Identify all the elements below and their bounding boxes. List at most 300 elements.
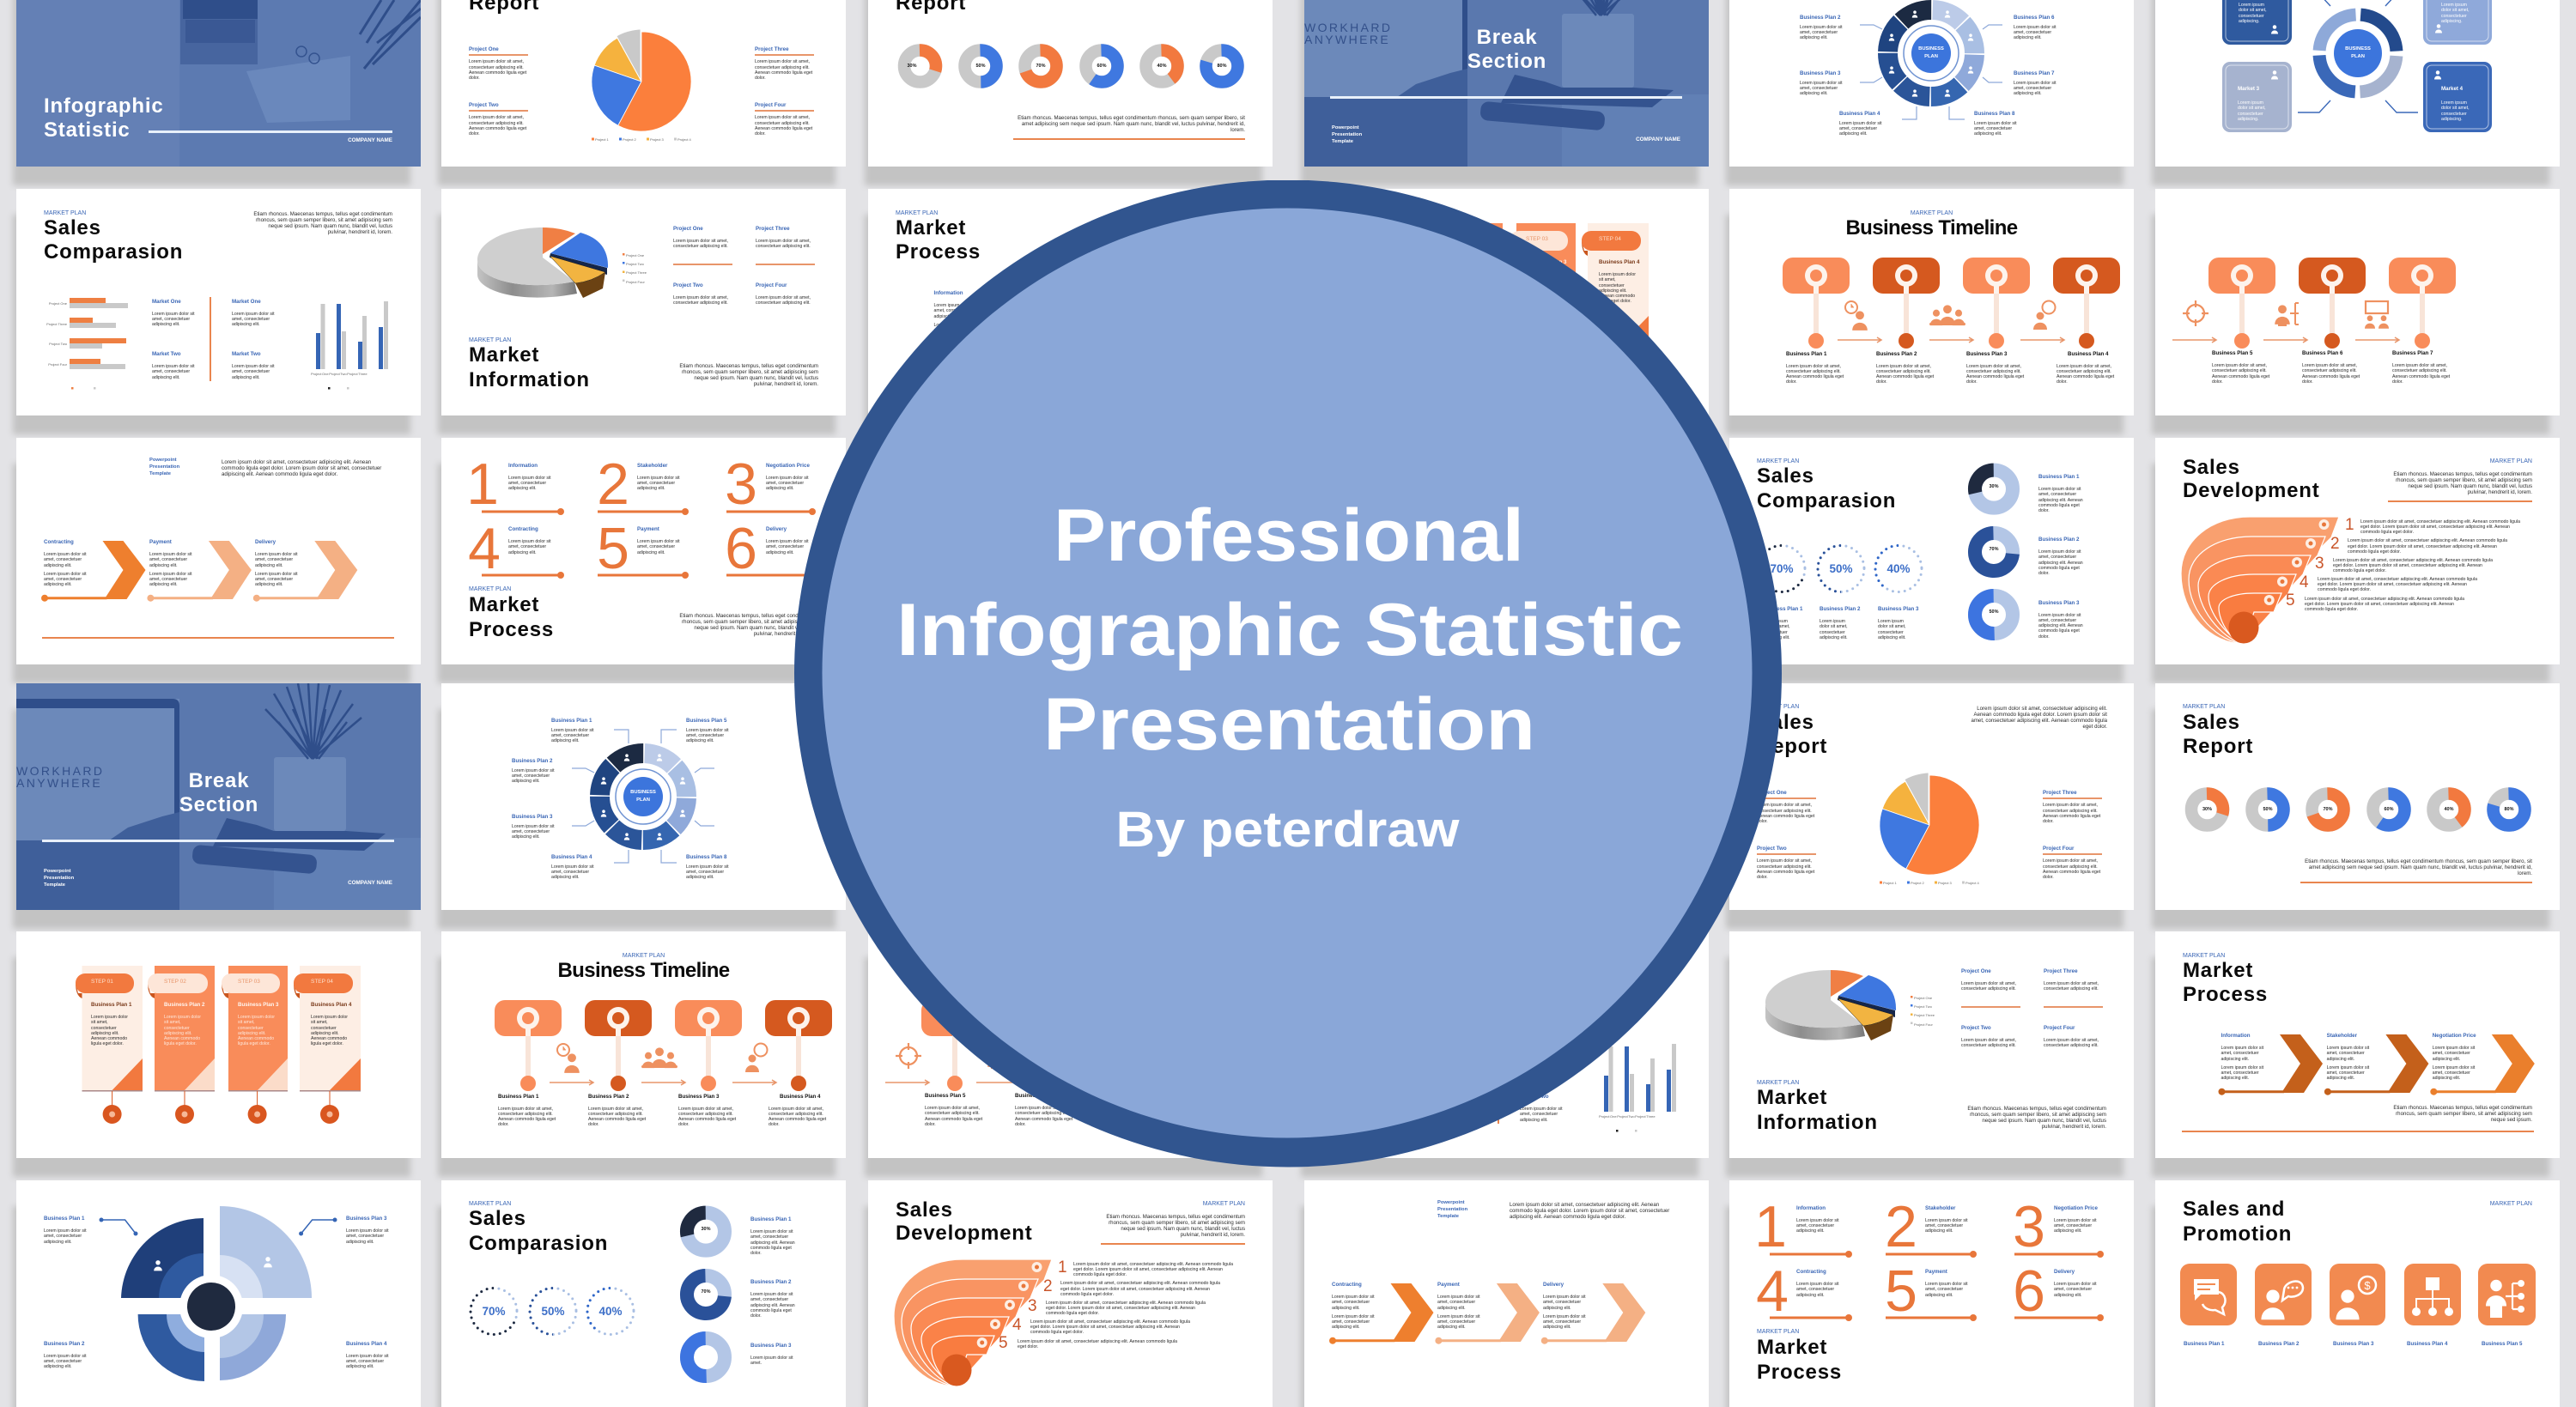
text: plan 2 <box>2038 537 2083 576</box>
percent 70: 70% <box>482 1305 506 1317</box>
title <box>1467 26 1546 73</box>
label: plan 2: Business Plan 2 <box>2258 1341 2299 1347</box>
text: market one <box>152 299 195 327</box>
panel: Sales Report pie <box>1729 683 2134 910</box>
subtitle: Powerpoint <box>1332 125 1359 130</box>
text: project four: Project Four <box>756 282 787 288</box>
donut value: 70% <box>2323 807 2332 812</box>
text: project four: Lorem ipsum dolor sit amet, consectetuer adipiscing elit. <box>2044 1038 2099 1048</box>
legend: Project 4 <box>677 137 691 141</box>
legend: Project 1 <box>595 137 609 141</box>
text: payment: Lorem ipsum dolor sit amet, consectetuer adipiscing elit. <box>637 539 680 555</box>
donut value: 50% <box>975 64 986 69</box>
text: payment <box>1925 1270 1970 1298</box>
text: market 2: Lorem ipsum dolor sit amet, consectetuer adipiscing. <box>2441 3 2470 24</box>
text: negotiation price: Negotiation Price <box>766 463 810 469</box>
text: plan 3 <box>2038 601 2083 640</box>
text: plan 3: Lorem ipsum dolor sit amet, consectetuer adipiscing elit. Aenean commodo ligula eget dolor. <box>1526 272 1563 304</box>
text: delivery: Delivery <box>1543 1282 1564 1288</box>
text: payment <box>149 540 194 587</box>
donut value: 70% <box>1989 547 1999 552</box>
title <box>469 593 554 642</box>
text: market two: Lorem ipsum dolor sit amet, consectetuer adipiscing elit. <box>232 364 275 380</box>
number 2: 2 <box>1885 1193 1917 1258</box>
text: plan 5: Business Plan 5 <box>686 718 726 724</box>
step 3 label: STEP 03 <box>238 979 260 984</box>
column chart <box>316 301 388 390</box>
text: negotiation price: Lorem ipsum dolor sit amet, consectetuer adipiscing elit. <box>766 476 809 491</box>
text: payment: Payment <box>637 526 659 532</box>
description: Etiam rhoncus. Maecenas tempus, tellus eget condimentum rhoncus, sem quam semper libero, sit amet adipiscing sem neque sed ipsum. Nam quam nunc, blandit vel, luctus pulvinar, hendrerit id, lorem. <box>679 363 818 387</box>
text: project one: Lorem ipsum dolor sit amet, consectetuer adipiscing elit. <box>673 239 728 249</box>
text: project four: Lorem ipsum dolor sit amet, consectetuer adipiscing elit. Aenean commodo ligula eget dolor. <box>755 115 812 136</box>
percent 50: 50% <box>541 1305 565 1317</box>
text: project two <box>469 102 528 136</box>
text: stakeholder: Stakeholder <box>637 463 667 469</box>
text: plan 1 <box>1786 352 1846 385</box>
text: plan 4 <box>769 1095 829 1128</box>
text: plan 4: Business Plan 4 <box>551 854 592 860</box>
text: delivery: Lorem ipsum dolor sit amet, consectetuer adipiscing elit. <box>1543 1314 1586 1330</box>
text: market two <box>152 351 195 380</box>
text: project four: Project Four <box>2044 1025 2075 1031</box>
text: plan 1: Lorem ipsum dolor sit amet, consectetuer adipiscing elit. Aenean commodo ligula eget dolor. <box>91 1015 128 1046</box>
step 4 label: STEP 04 <box>311 979 333 984</box>
text: plan 1 <box>750 1217 795 1256</box>
subtitle: Presentation <box>1332 132 1362 137</box>
legend <box>595 137 691 142</box>
donut values: 30% <box>907 64 917 69</box>
legend: Project 2 <box>623 137 636 141</box>
title <box>469 343 590 392</box>
title: Process <box>1757 1361 1842 1384</box>
text: plan 7: Lorem ipsum dolor sit amet, consectetuer adipiscing elit. <box>2014 81 2057 96</box>
label: MARKET PLAN <box>1757 704 1799 710</box>
title: Sales and <box>2183 1198 2285 1221</box>
laptop screen words <box>16 766 104 789</box>
description: Lorem ipsum dolor sit amet, consectetuer adipiscing elit. Aenean commodo ligula eget dolor. Lorem ipsum dolor sit amet, consectetuer adipiscing elit. Aenean commodo ligula eget dolor. <box>1510 1202 1669 1220</box>
title: Sales <box>2183 456 2240 479</box>
description: Etiam rhoncus. Maecenas tempus, tellus eget condimentum rhoncus, sem quam semper libero, sit amet adipiscing sem neque sed ipsum. Nam quam nunc, blandit vel, luctus pulvinar, hendrerit id, lorem. <box>679 613 818 637</box>
text: plan 3: Lorem ipsum dolor sit amet, consectetuer adipiscing elit. Aenean commodo ligula eget dolor. <box>678 1107 736 1127</box>
text: plan 2 <box>1820 607 1854 640</box>
chevrons <box>2215 1033 2537 1096</box>
text: contracting: Lorem ipsum dolor sit amet, consectetuer adipiscing elit. <box>44 552 87 568</box>
steps graphic <box>75 964 362 1125</box>
text: plan 4: Lorem ipsum dolor sit amet, consectetuer adipiscing elit. Aenean commodo ligula eget dolor. <box>1599 272 1636 304</box>
text: plan 1: Business Plan 1 <box>1379 259 1419 265</box>
panel: light chevrons <box>16 438 421 664</box>
title: Process <box>896 240 981 264</box>
text: market one <box>232 299 275 327</box>
label: MARKET PLAN <box>1757 1329 1799 1334</box>
text: market one: Market One <box>1520 1041 1549 1047</box>
text: plan 5: Lorem ipsum dolor sit amet, consectetuer adipiscing elit. Aenean commodo ligula eget dolor. <box>2212 363 2269 385</box>
donut charts <box>1966 462 2021 642</box>
text: plan 3: Business Plan 3 <box>750 1343 791 1348</box>
text: plan 1: Business Plan 1 <box>91 1002 131 1008</box>
horizontal bar chart <box>70 298 128 390</box>
bar labels: Project Two <box>49 342 67 346</box>
text: stakeholder: Stakeholder <box>1925 1205 1955 1211</box>
text: plan 1: Lorem ipsum dolor sit amet, consectetuer adipiscing elit. <box>44 1228 87 1245</box>
label: MARKET PLAN <box>469 585 511 592</box>
donut value: 50% <box>1989 609 1999 615</box>
main title <box>896 494 1683 766</box>
text: payment: Payment <box>1925 1269 1947 1275</box>
cards and ring diagram <box>2222 0 2492 132</box>
label: MARKET PLAN <box>896 209 938 216</box>
title <box>896 1198 1033 1245</box>
number 1: 1 <box>1754 1193 1787 1258</box>
text: negotiation price: Lorem ipsum dolor sit amet, consectetuer adipiscing elit. <box>1145 303 1188 319</box>
text: plan 7 <box>2392 351 2452 385</box>
text: plan 1: Lorem ipsum dolor sit amet, consectetuer adipiscing elit. <box>1762 619 1790 640</box>
text: information: Lorem ipsum dolor sit amet, consectetuer adipiscing elit. <box>2221 1065 2263 1081</box>
text: stakeholder: Lorem ipsum dolor sit amet, consectetuer adipiscing elit. <box>637 476 680 491</box>
chevrons <box>1327 1282 1649 1345</box>
text: delivery: Lorem ipsum dolor sit amet, consectetuer adipiscing elit. <box>766 539 809 555</box>
donut value: 30% <box>701 1227 711 1232</box>
text: delivery: Lorem ipsum dolor sit amet, consectetuer adipiscing elit. <box>1543 1295 1586 1311</box>
text: project three: Project Three <box>755 46 789 52</box>
title: Break <box>1477 26 1537 49</box>
text: plan 1 <box>1762 607 1796 640</box>
subtitle <box>1332 125 1362 144</box>
panel: quarter chart <box>16 1180 421 1407</box>
subtitle: Template <box>44 882 65 888</box>
panel: Market Process numbers <box>1729 1180 2134 1407</box>
title: Sales <box>1757 711 1814 734</box>
text: delivery: Lorem ipsum dolor sit amet, consectetuer adipiscing elit. <box>2054 1282 2097 1298</box>
donut value: 30% <box>2202 807 2212 812</box>
text: stakeholder: Lorem ipsum dolor sit amet, consectetuer adipiscing elit. <box>2327 1065 2369 1081</box>
panel: Sales and Promotion <box>2155 1180 2560 1407</box>
text: project three <box>755 46 814 81</box>
description: Etiam rhoncus. Maecenas tempus, tellus eget condimentum rhoncus, sem quam semper libero, sit amet adipiscing sem neque sed ipsum. Nam quam nunc, blandit vel, luctus pulvinar, hendrerit id, lorem. <box>253 211 392 235</box>
ring center label: BUSINESS <box>2345 46 2371 52</box>
label: MARKET PLAN <box>1757 1080 1799 1085</box>
title: Information <box>1757 1111 1878 1134</box>
text: plan 2: Business Plan 2 <box>1452 259 1492 265</box>
wheel center label: BUSINESS <box>630 790 656 795</box>
text: delivery: Delivery <box>2054 1269 2075 1275</box>
text: plan 1: Lorem ipsum dolor sit amet, consectetuer adipiscing elit. Aenean commodo ligula eget dolor. <box>1379 272 1416 304</box>
steps graphic <box>1363 221 1650 382</box>
text: project three: Lorem ipsum dolor sit amet, consectetuer adipiscing elit. <box>2044 981 2099 992</box>
text: plan 3 <box>1800 70 1843 96</box>
panel: Market Information 3D pie <box>1729 931 2134 1158</box>
text: plan 5: Business Plan 5 <box>2212 350 2252 356</box>
description: Etiam rhoncus. Maecenas tempus, tellus eget condimentum rhoncus, sem quam semper libero, sit amet adipiscing sem neque sed ipsum. Nam quam nunc, blandit vel, luctus pulvinar, hendrerit id, lorem. <box>1018 115 1245 132</box>
donut value: 30% <box>1989 484 1999 489</box>
number 4: 4 <box>1012 1315 1022 1334</box>
text: plan 2: Lorem ipsum dolor sit amet, consectetuer adipiscing elit. <box>1800 25 1843 40</box>
title <box>1757 711 1827 760</box>
text: plan 4 <box>1839 111 1882 136</box>
text: plan 3: Lorem ipsum dolor sit amet, consectetuer adipiscing elit. Aenean commodo ligula eget dolor. <box>1966 364 2024 385</box>
text: project two <box>673 283 732 306</box>
step 2 label: STEP 02 <box>1452 235 1474 242</box>
text: payment: Lorem ipsum dolor sit amet, consectetuer adipiscing elit. <box>1437 1314 1480 1330</box>
text: plan 1: Lorem ipsum dolor sit amet, consectetuer adipiscing elit. Aenean commodo ligula eget dolor. <box>498 1107 556 1127</box>
text: contracting: Contracting <box>44 539 74 545</box>
title: Market <box>2183 959 2253 982</box>
label: MARKET PLAN <box>1203 1201 1245 1207</box>
text: plan 3: Business Plan 3 <box>1526 259 1566 265</box>
text: negotiation price: Negotiation Price <box>1145 290 1189 296</box>
number 6: 6 <box>725 515 757 580</box>
text: plan 3: Business Plan 3 <box>346 1216 386 1222</box>
text: market 4: Lorem ipsum dolor sit amet, consectetuer adipiscing. <box>2441 100 2470 122</box>
text: project two: Project Two <box>1757 846 1787 852</box>
text: project four <box>755 102 814 136</box>
text: plan 1 <box>2038 475 2083 513</box>
text: plan 3 <box>346 1216 391 1245</box>
text: project three: Lorem ipsum dolor sit amet, consectetuer adipiscing elit. Aenean commodo ligula eget dolor. <box>755 59 812 81</box>
pie legend <box>626 252 647 287</box>
text: stakeholder <box>2327 1034 2372 1081</box>
text: contracting: Lorem ipsum dolor sit amet, consectetuer adipiscing elit. <box>1332 1295 1375 1311</box>
text: plan 5: Lorem ipsum dolor sit amet, consectetuer adipiscing elit. Aenean commodo ligula eget dolor. <box>925 1106 982 1127</box>
number 3: 3 <box>1028 1296 1037 1315</box>
panel: Break Section <box>16 683 421 910</box>
text: project four: Lorem ipsum dolor sit amet, consectetuer adipiscing elit. <box>756 295 811 306</box>
text: plan 3: Lorem ipsum dolor sit amet, consectetuer adipiscing elit. <box>512 824 555 840</box>
text: payment: Lorem ipsum dolor sit amet, consectetuer adipiscing elit. <box>1437 1295 1480 1311</box>
donut charts <box>2181 785 2535 834</box>
number 5: 5 <box>999 1334 1008 1352</box>
pie legend: Project One <box>626 253 644 258</box>
legend: Project 1 <box>1883 881 1897 884</box>
title: Information <box>469 368 590 391</box>
text: plan 7: Business Plan 7 <box>2392 350 2433 356</box>
text: plan 1: Business Plan 1 <box>1786 351 1826 357</box>
text: negotiation price: Lorem ipsum dolor sit amet, consectetuer adipiscing elit. <box>1145 323 1188 338</box>
legend: Project 3 <box>1938 881 1952 884</box>
number 2: 2 <box>597 452 629 517</box>
text: plan 8: Business Plan 8 <box>1974 111 2014 117</box>
title <box>1757 1086 1878 1135</box>
text: market 3: Market 3 <box>2238 86 2259 92</box>
panel: Sales Report donuts <box>868 0 1273 167</box>
text: plan 1: Business Plan 1 <box>551 718 592 724</box>
text: market two: Market Two <box>232 351 261 357</box>
text: contracting: Lorem ipsum dolor sit amet, consectetuer adipiscing elit. <box>1796 1282 1839 1298</box>
panel: Market Process numbers <box>441 438 846 664</box>
text: negotiation price: Negotiation Price <box>2054 1205 2098 1211</box>
pie legend <box>1914 994 1935 1029</box>
title: Comparasion <box>1757 489 1896 512</box>
text: project four: Lorem ipsum dolor sit amet, consectetuer adipiscing elit. Aenean commodo ligula eget dolor. <box>2043 858 2100 880</box>
text: contracting: Contracting <box>1796 1269 1826 1275</box>
text: project one: Project One <box>1961 968 1991 974</box>
text: contracting <box>508 527 553 555</box>
text: plan 2: Lorem ipsum dolor sit amet, consectetuer adipiscing elit. Aenean commodo ligula eget dolor. <box>1876 364 1934 385</box>
text: project one: Project One <box>469 46 499 52</box>
column chart <box>1601 1041 1680 1134</box>
number 5: 5 <box>597 515 629 580</box>
text: plan 3: Lorem ipsum dolor sit amet, consectetuer adipiscing elit. Aenean commodo ligula eget dolor. <box>238 1015 275 1046</box>
panel: Timeline continued <box>868 931 1273 1158</box>
number 2: 2 <box>2330 535 2340 553</box>
text: contracting: Lorem ipsum dolor sit amet, consectetuer adipiscing elit. <box>508 539 551 555</box>
wheel center label: BUSINESS <box>1918 46 1944 52</box>
title: Business Timeline <box>557 959 730 982</box>
pie legend: Project Three <box>1914 1013 1935 1017</box>
text: plan 4: Lorem ipsum dolor sit amet, consectetuer adipiscing elit. Aenean commodo ligula eget dolor. <box>769 1107 826 1127</box>
panel: Sales Comparison donuts <box>1729 438 2134 664</box>
donut value: 60% <box>2384 807 2394 812</box>
text: stakeholder: Lorem ipsum dolor sit amet, consectetuer adipiscing elit. <box>1040 303 1082 319</box>
text line 5: Lorem ipsum dolor sit amet, consectetuer adipiscing elit. Aenean commodo ligula eget dolor. <box>1018 1339 1177 1349</box>
text: plan 1 <box>551 719 596 744</box>
text: plan 5: Lorem ipsum dolor sit amet, consectetuer adipiscing elit. <box>686 728 729 743</box>
text: plan 3 <box>512 815 556 840</box>
text: plan 8: Lorem ipsum dolor sit amet, consectetuer adipiscing elit. <box>1974 121 2017 136</box>
text: plan 4: Business Plan 4 <box>1839 111 1880 117</box>
photo background <box>1304 0 1709 167</box>
text: plan 1: Business Plan 1 <box>498 1094 538 1100</box>
pie chart <box>1875 769 1987 889</box>
subtitle: Template <box>1332 139 1353 144</box>
panel: Steps <box>1304 189 1709 415</box>
text: stakeholder <box>1040 291 1084 338</box>
text: market 4 <box>2441 86 2470 122</box>
text: plan 3: Lorem ipsum dolor sit amet. <box>750 1355 793 1366</box>
text: project one: Project One <box>673 226 703 232</box>
3D pie chart <box>477 227 625 298</box>
title <box>2183 456 2320 502</box>
title: Break <box>189 769 249 792</box>
legend: Project 4 <box>1965 881 1979 884</box>
text: delivery <box>1543 1283 1588 1330</box>
text: information <box>934 291 979 338</box>
text: plan 6 <box>2014 15 2057 40</box>
quarter chart <box>16 1180 421 1407</box>
panel: Market cards diagram <box>2155 0 2560 167</box>
percent 40: 40% <box>598 1305 623 1317</box>
ring center label: PLAN <box>2351 54 2365 59</box>
label: MARKET PLAN <box>469 337 511 343</box>
donut value: 70% <box>1036 64 1046 69</box>
step 4 label: STEP 04 <box>1599 235 1621 242</box>
title: Market <box>1757 1336 1827 1359</box>
bar labels <box>46 301 67 367</box>
donut charts <box>678 1204 733 1385</box>
text: project two: Lorem ipsum dolor sit amet, consectetuer adipiscing elit. Aenean commodo ligula eget dolor. <box>469 115 526 136</box>
label: MARKET PLAN <box>623 953 665 958</box>
text: plan 2: Business Plan 2 <box>44 1341 84 1347</box>
text: negotiation price: Lorem ipsum dolor sit amet, consectetuer adipiscing elit. <box>2054 1218 2097 1234</box>
text: stakeholder: Lorem ipsum dolor sit amet, consectetuer adipiscing elit. <box>1040 323 1082 338</box>
panel: Sales Comparison donuts <box>441 1180 846 1407</box>
panel: Timeline continued <box>2155 189 2560 415</box>
text: stakeholder <box>1925 1206 1970 1234</box>
bar labels: Project One <box>49 301 67 306</box>
donut value: 80% <box>1217 64 1226 69</box>
percent 40: 40% <box>1886 561 1911 575</box>
layered fan graphic <box>2179 515 2341 646</box>
text: plan 2 <box>750 1280 795 1319</box>
title: Sales <box>2183 711 2240 734</box>
text: negotiation price: Negotiation Price <box>2433 1033 2476 1039</box>
subtitle <box>149 457 179 478</box>
laptop screen words: ANYWHERE <box>16 776 102 790</box>
text: plan 8 <box>686 855 731 881</box>
text: plan 1: Business Plan 1 <box>2038 474 2079 480</box>
text: plan 3: Business Plan 3 <box>1878 606 1918 612</box>
number 1: 1 <box>2345 516 2354 534</box>
pie legend: Project Four <box>626 280 645 284</box>
text: stakeholder: Stakeholder <box>2327 1033 2357 1039</box>
text: plan 3 <box>1966 352 2026 385</box>
text: plan 3: Lorem ipsum dolor sit amet, consectetuer adipiscing elit. <box>1878 619 1906 640</box>
donut value: 60% <box>1097 64 1106 69</box>
text: plan 5 <box>925 1094 985 1127</box>
number 4: 4 <box>468 515 501 580</box>
label: plan 4: Business Plan 4 <box>2407 1341 2447 1347</box>
panel: Sales Comparison bars <box>16 189 421 415</box>
text: delivery: Delivery <box>766 526 787 532</box>
text: project three <box>2044 969 2103 1008</box>
number 3: 3 <box>725 452 757 517</box>
number 5: 5 <box>2286 591 2295 609</box>
text: plan 2: Business Plan 2 <box>512 758 552 764</box>
percent 50: 50% <box>1829 561 1853 575</box>
panel: Sales Report pie <box>441 0 846 167</box>
panel: Market Information 3D pie <box>441 189 846 415</box>
pie legend: Project Two <box>1914 1004 1932 1009</box>
text: plan 2: Lorem ipsum dolor sit amet, consectetuer adipiscing elit. Aenean commodo ligula eget dolor. <box>164 1015 201 1046</box>
text: plan 3: Business Plan 3 <box>1800 70 1840 76</box>
bar labels: Project Three <box>46 322 67 326</box>
text: market one: Lorem ipsum dolor sit amet, consectetuer adipiscing elit. <box>152 312 195 327</box>
text line 4: Lorem ipsum dolor sit amet, consectetuer adipiscing elit. Aenean commodo ligula eget dolor. Lorem ipsum dolor sit amet, consectetuer adipiscing elit. Aenean commodo ligula eget dolor. <box>2318 577 2477 592</box>
text: information: Information <box>2221 1033 2251 1039</box>
subtitle: Presentation <box>1437 1207 1467 1212</box>
chevrons <box>928 290 1250 354</box>
number lines <box>480 506 818 580</box>
text: market two: Market Two <box>1520 1094 1549 1100</box>
title: Sales <box>469 1207 526 1230</box>
wheel diagram <box>570 726 716 867</box>
text: plan 7: Lorem ipsum dolor sit amet, consectetuer adipiscing elit. Aenean commodo ligula eget dolor. <box>2392 363 2450 385</box>
text: project one: Lorem ipsum dolor sit amet, consectetuer adipiscing elit. <box>1961 981 2016 992</box>
pie legend: Project One <box>1914 996 1932 1000</box>
description: Etiam rhoncus. Maecenas tempus, tellus eget condimentum rhoncus, sem quam semper libero, sit amet adipiscing sem neque sed ipsum. <box>1106 362 1245 380</box>
text: plan 3: Lorem ipsum dolor sit amet, consectetuer adipiscing elit. Aenean commodo ligula eget dolor. <box>2038 613 2083 640</box>
text: plan 6: Business Plan 6 <box>1015 1093 1055 1099</box>
text: plan 1: Business Plan 1 <box>1762 606 1802 612</box>
legend: Project 2 <box>1911 881 1924 884</box>
text: plan 2 <box>512 759 556 785</box>
text: plan 4: Business Plan 4 <box>2068 351 2108 357</box>
panel: Sales Development <box>2155 438 2560 664</box>
text: payment <box>1437 1283 1482 1330</box>
text: information: Information <box>934 290 963 296</box>
description: Etiam rhoncus. Maecenas tempus, tellus eget condimentum rhoncus, sem quam semper libero, sit amet adipiscing sem neque sed ipsum. <box>2393 1105 2532 1123</box>
text: market two: Lorem ipsum dolor sit amet, consectetuer adipiscing elit. <box>152 364 195 380</box>
title: Development <box>2183 479 2320 502</box>
text: negotiation price <box>766 464 811 491</box>
pie legend: Project Two <box>626 262 644 266</box>
panel: light chevrons <box>1304 1180 1709 1407</box>
text: plan 2: Business Plan 2 <box>164 1002 204 1008</box>
text line 2: Lorem ipsum dolor sit amet, consectetuer adipiscing elit. Aenean commodo ligula eget dolor. Lorem ipsum dolor sit amet, consectetuer adipiscing elit. Aenean commodo ligula eget dolor. <box>1060 1281 1220 1297</box>
step 1 label: STEP 01 <box>91 979 113 984</box>
company name: COMPANY NAME <box>1636 136 1680 143</box>
